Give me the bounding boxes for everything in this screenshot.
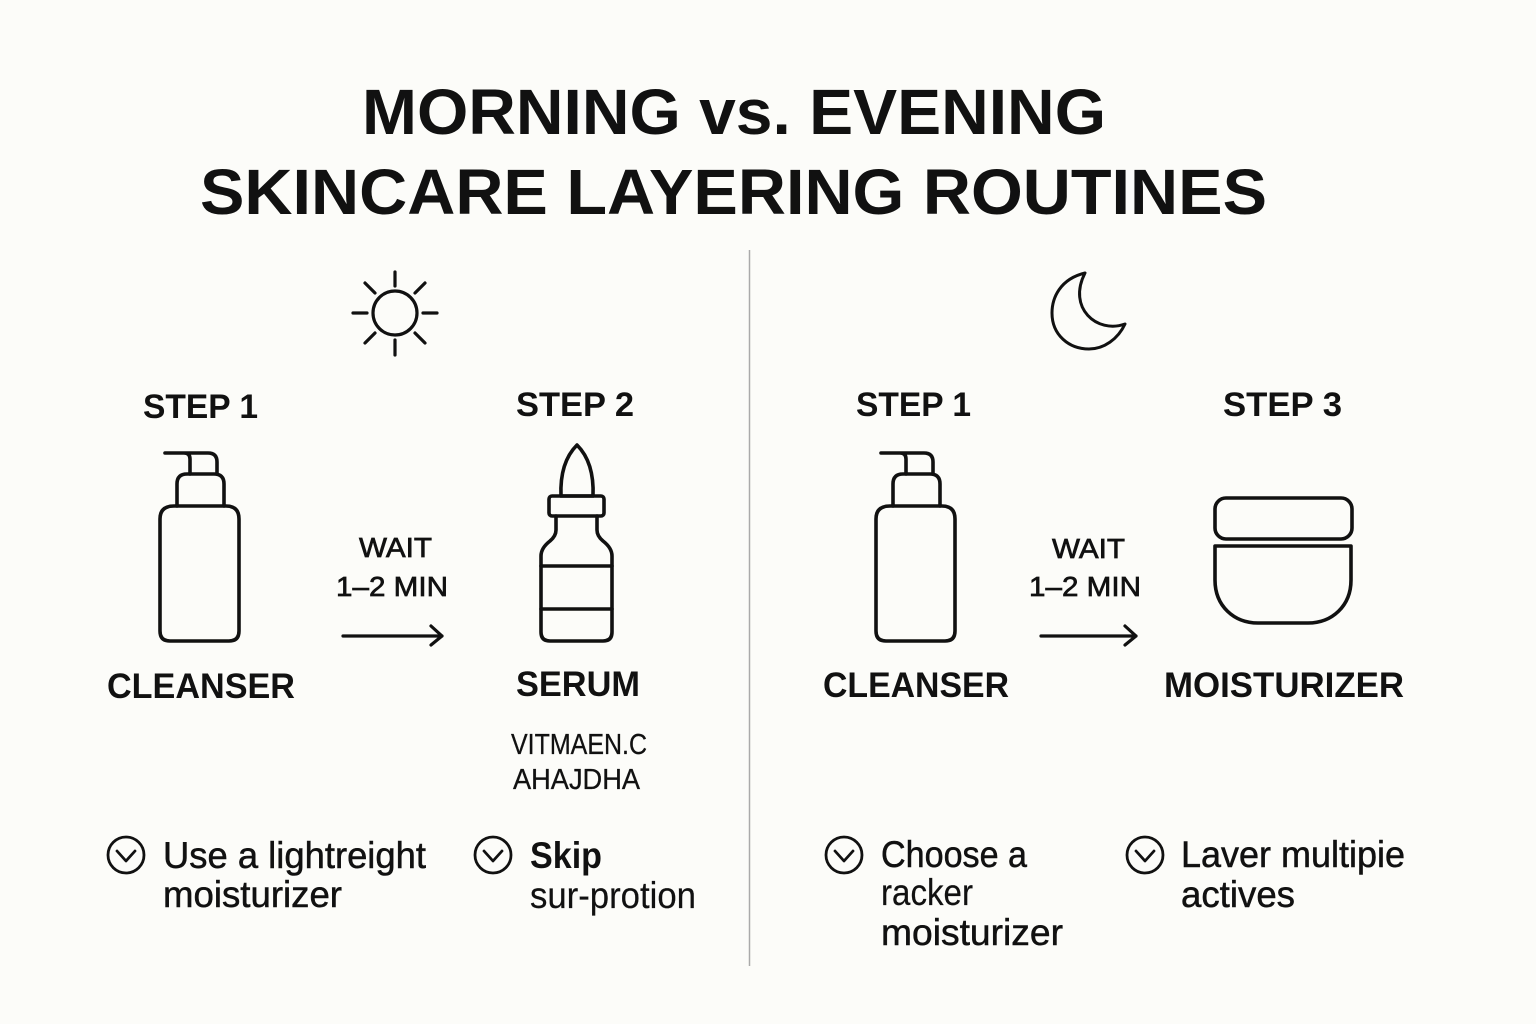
tip: lightweight moisturizer: moisturizer: [163, 874, 342, 915]
tip: richer moisturizer: moisturizer: [881, 912, 1063, 953]
tip: layer actives: [1127, 834, 1405, 915]
icon: cleanser bottle evening: [876, 453, 955, 641]
icon: moisturizer jar: [1215, 498, 1352, 623]
serum actives: VITMAEN.C: [511, 729, 647, 761]
evening wait label: [1029, 533, 1141, 602]
evening wait label: WAIT: [1052, 533, 1125, 564]
tip: richer moisturizer: racker: [881, 872, 973, 913]
cleanser label evening: CLEANSER: [823, 666, 1009, 705]
evening arrow: [1041, 626, 1136, 645]
title: [200, 76, 1267, 228]
serum label: SERUM: [516, 665, 640, 704]
evening step 3 label: STEP 3: [1223, 386, 1342, 424]
icon: sun: [353, 272, 437, 355]
icon: serum dropper bottle: [541, 445, 612, 641]
cleanser label morning: CLEANSER: [107, 667, 295, 706]
morning arrow: [343, 626, 442, 645]
tip: layer actives: Laver multipie: [1181, 834, 1405, 875]
tip: lightweight moisturizer: Use a lightreight: [163, 835, 427, 876]
serum actives: AHAJDHA: [513, 764, 641, 796]
morning step 2 label: STEP 2: [516, 386, 634, 424]
tip: skip sunscreen: sur-protion: [530, 875, 696, 916]
title: MORNING vs. EVENING: [362, 76, 1106, 148]
tip: skip sunscreen: Skip: [530, 835, 602, 876]
icon: moon: [1052, 273, 1125, 349]
tip: lightweight moisturizer: [108, 835, 427, 915]
evening wait label: 1–2 MIN: [1029, 571, 1141, 602]
tip: richer moisturizer: [826, 834, 1063, 953]
moisturizer label: MOISTURIZER: [1164, 666, 1404, 705]
morning wait label: 1–2 MIN: [336, 571, 448, 602]
icon: cleanser bottle morning: [160, 453, 239, 641]
morning step 1 label: STEP 1: [143, 388, 258, 426]
morning wait label: WAIT: [359, 532, 432, 563]
tip: richer moisturizer: Choose a: [881, 834, 1027, 875]
evening step 1 label: STEP 1: [856, 386, 971, 424]
tip: layer actives: actives: [1181, 874, 1295, 915]
morning wait label: [336, 532, 448, 602]
title: SKINCARE LAYERING ROUTINES: [200, 156, 1267, 228]
tip: skip sunscreen: [475, 835, 696, 916]
serum actives: [511, 729, 647, 796]
